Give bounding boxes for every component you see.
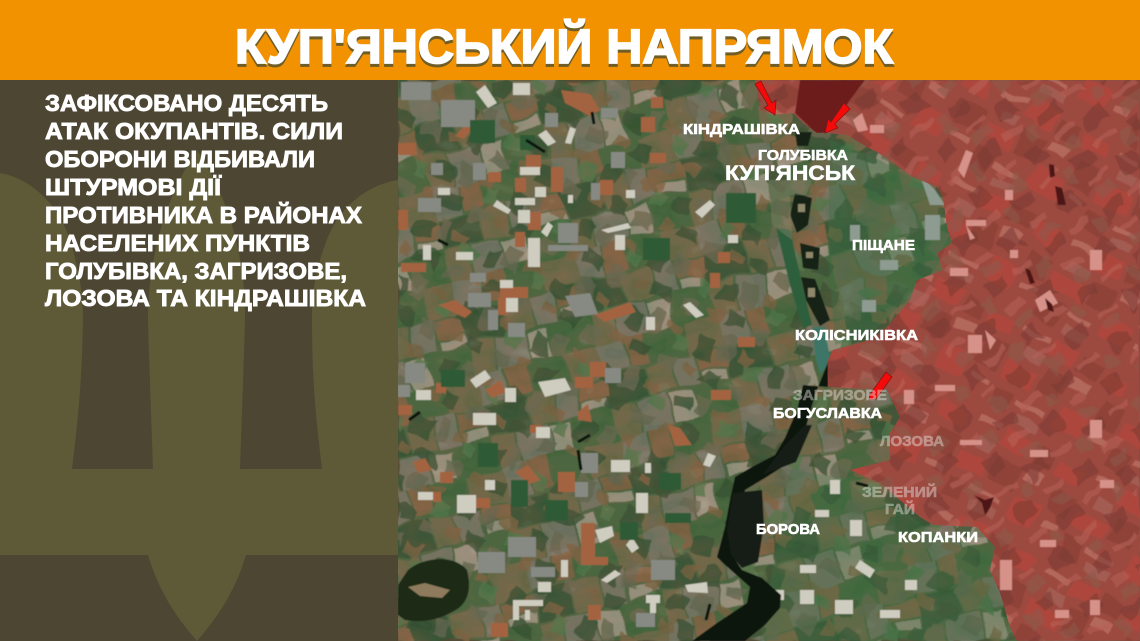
arrow: attack toward Zahryzove [869, 372, 892, 400]
label: Kolisnykivka: КОЛІСНИКІВКА [795, 328, 919, 344]
clearing in woodland [408, 583, 450, 598]
green zone south [760, 470, 1010, 641]
occupied territory overlay [750, 80, 1140, 641]
river [692, 362, 828, 641]
forest: west woodland [398, 559, 469, 621]
text block: attack summary: ОБОРОНИ ВІДБИВАЛИ [45, 146, 315, 172]
label: Holubivka: ГОЛУБІВКА [758, 148, 849, 164]
ponds [409, 112, 868, 620]
text block: attack summary: НАСЕЛЕНИХ ПУНКТІВ [45, 230, 310, 256]
panel: left text panel [0, 80, 398, 641]
text block: attack summary: ЛОЗОВА ТА КІНДРАШІВКА [45, 285, 366, 311]
title: КУП'ЯНСЬКИЙ НАПРЯМОК [235, 19, 894, 74]
label: Zelenyi Hai: ГАЙ [885, 500, 915, 518]
green zone east of the river [828, 140, 948, 345]
label: Lozova: ЛОЗОВА [880, 434, 945, 450]
text block: attack summary: ЗАФІКСОВАНО ДЕСЯТЬ [45, 90, 328, 116]
forest: east bank of river [727, 425, 812, 568]
arrow: attack toward Kindrashivka [755, 81, 776, 115]
label: Kindrashivka: КІНДРАШІВКА [683, 122, 801, 138]
map labels [683, 122, 978, 546]
text block: attack summary: ШТУРМОВІ ДІЇ [45, 174, 222, 200]
dark red burned area [795, 80, 865, 133]
arrow: attack toward Holubivka [825, 103, 850, 133]
light fields in occupied area [853, 113, 1114, 618]
text block: attack summary [45, 90, 366, 311]
text block: attack summary: АТАК ОКУПАНТІВ. СИЛИ [45, 118, 343, 144]
icon: trident watermark [0, 150, 398, 641]
text block: attack summary: ГОЛУБІВКА, ЗАГРИЗОВЕ, [45, 258, 347, 284]
city of Kupyansk [768, 180, 812, 240]
label: Zahryzove: ЗАГРИЗОВЕ [793, 388, 887, 404]
label: Pishchane: ПІЩАНЕ [852, 238, 915, 254]
label: Kupiansk: КУП'ЯНСЬК [725, 162, 855, 185]
label: Zelenyi Hai: ЗЕЛЕНИЙ [862, 483, 937, 501]
dark ponds in occupied area [974, 164, 1066, 515]
forest: north-east of Kupyansk [790, 132, 830, 326]
text block: attack summary: ПРОТИВНИКА В РАЙОНАХ [45, 201, 363, 228]
label: Kopanky: КОПАНКИ [898, 530, 978, 546]
teal river section [813, 327, 831, 374]
orange title bar [0, 0, 1140, 80]
label: Borova: БОРОВА [756, 522, 821, 538]
map: satellite terrain [398, 80, 1140, 641]
label: Bohuslavka: БОГУСЛАВКА [773, 406, 883, 422]
speckled clearings [798, 204, 815, 297]
grey fields east of Kupiansk [850, 175, 945, 312]
label: Zelenyi Hai [862, 483, 937, 518]
white fields south-east [770, 480, 917, 618]
